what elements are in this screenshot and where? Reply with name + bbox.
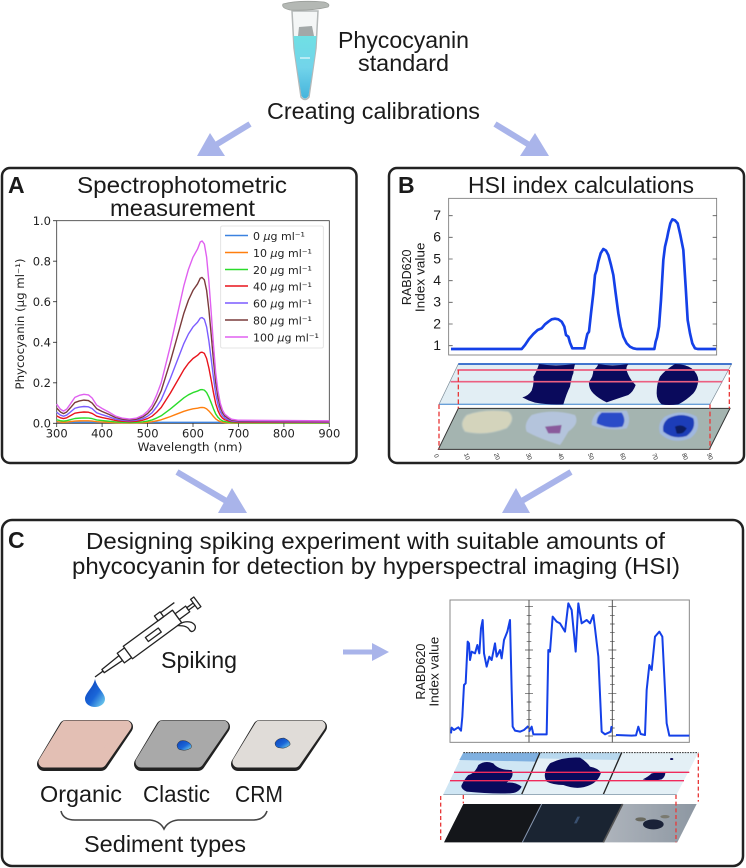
tile labels: [40, 781, 283, 807]
line chart: absorbance spectra: 300: [46, 426, 68, 440]
label: sediment types: Sediment types: [84, 831, 246, 857]
sediment tile: CRM: [238, 726, 320, 764]
strip scale labels: 40: [556, 453, 564, 462]
line chart: absorbance spectra: Wavelength (nm): [138, 440, 242, 454]
heading: creating calibrations: Creating calibrations: [267, 98, 480, 124]
line chart: absorbance spectra: [13, 214, 340, 454]
panel letter B: B: [398, 172, 415, 198]
heading: phycocyanin standard: [338, 27, 469, 76]
icon: drop: [85, 679, 105, 707]
red projection guides C: [441, 753, 698, 843]
line chart: RABD620 index: 4: [433, 272, 441, 288]
image: sample photo strip C: [444, 804, 697, 842]
chart legend: 40 µg ml⁻¹: [253, 280, 312, 294]
title C: phycocyanin for detection by hyperspectral imaging (HSI): [72, 553, 680, 579]
label: spiking: Spiking: [161, 647, 237, 673]
title A: Spectrophotometric: [77, 172, 287, 198]
line chart: absorbance spectra: 0.4: [33, 336, 51, 350]
spike on CRM: [275, 738, 290, 748]
line chart: RABD620 index: [399, 198, 717, 355]
chart legend: [221, 226, 323, 348]
line chart: RABD620 index: 6: [433, 229, 441, 245]
tile labels: Organic: [40, 781, 122, 807]
panel A: spectrophotometric measurement: [2, 168, 356, 463]
title A: measurement: [110, 195, 256, 221]
line chart: absorbance spectra: 1.0: [33, 214, 51, 228]
arrow: A to C: [177, 472, 247, 513]
panel letter A: A: [8, 172, 25, 198]
image: index map strip: [439, 364, 732, 405]
tile labels: Clastic: [143, 781, 210, 807]
strip scale labels: [432, 453, 713, 462]
panel B: HSI index calculations: [389, 168, 744, 463]
line chart: RABD620 index: 1: [433, 337, 441, 353]
icon: phycocyanin tube: [283, 1, 329, 99]
image: sample photo strip: [438, 408, 730, 449]
strip scale labels: 80: [680, 453, 688, 462]
line chart: absorbance spectra: Phycocyanin (µg ml⁻¹): [13, 258, 27, 390]
panel letter C: C: [8, 527, 25, 553]
spike on clastic: [177, 740, 191, 750]
brace: [61, 811, 267, 829]
title B: HSI index calculations: [468, 172, 694, 198]
sediment tile: organic: [44, 726, 126, 764]
line chart: RABD620 index: 5: [433, 250, 441, 266]
line chart: RABD620 index: 3: [433, 294, 441, 310]
line chart: absorbance spectra: 900: [318, 426, 340, 440]
strip scale labels: 50: [586, 453, 594, 462]
strip scale labels: 60: [618, 453, 626, 462]
title A: [77, 172, 287, 221]
strip scale labels: 30: [524, 453, 532, 462]
arrow: to panel B: [495, 124, 549, 156]
line chart: RABD620 index: RABD620: [399, 249, 414, 305]
tile labels: CRM: [235, 781, 283, 807]
chart legend: 60 µg ml⁻¹: [253, 298, 312, 310]
line chart: absorbance spectra: 600: [182, 426, 204, 440]
line chart: RABD620 index: Index value: [413, 242, 428, 312]
line chart: RABD620 index: 2: [433, 315, 441, 331]
heading: phycocyanin standard: standard: [358, 50, 449, 76]
arrow: to panel A: [197, 124, 250, 156]
line chart: absorbance spectra: 0.0: [33, 416, 51, 430]
chart legend: 20 µg ml⁻¹: [253, 264, 312, 277]
heading: phycocyanin standard: Phycocyanin: [338, 27, 469, 53]
strip scale labels: 70: [650, 453, 658, 462]
strip scale labels: 10: [462, 453, 470, 462]
strip scale labels: 20: [492, 453, 500, 462]
line chart: absorbance spectra: 0.6: [33, 295, 51, 309]
line chart: absorbance spectra: 0.8: [33, 254, 51, 268]
strip scale labels: 90: [705, 453, 713, 462]
line chart: absorbance spectra: 800: [273, 426, 295, 440]
image: index map strip C: [443, 753, 698, 794]
line chart: spiked sample index: [413, 600, 689, 742]
line chart: absorbance spectra: 0.2: [33, 376, 51, 390]
strip scale labels: 0: [432, 454, 439, 459]
line chart: spiked sample index: Index value: [426, 637, 441, 707]
title C: [72, 528, 680, 579]
red projection guides: [439, 370, 729, 449]
line chart: absorbance spectra: 400: [91, 426, 113, 440]
arrow: B to C: [502, 472, 571, 513]
chart legend: 80 µg ml⁻¹: [253, 314, 312, 328]
chart legend: 0 µg ml⁻¹: [253, 230, 305, 243]
line chart: absorbance spectra: 700: [227, 426, 249, 440]
line chart: absorbance spectra: 500: [137, 426, 159, 440]
panel C: spiking experiment: [2, 520, 743, 866]
chart legend: 10 µg ml⁻¹: [253, 247, 312, 260]
line chart: RABD620 index: 7: [433, 207, 441, 223]
sediment tile: clastic: [141, 726, 223, 764]
chart legend: 100 µg ml⁻¹: [253, 332, 319, 344]
arrow: to HSI results: [343, 643, 389, 661]
icon: pipette: [87, 591, 210, 694]
title C: Designing spiking experiment with suitable amounts of: [86, 528, 666, 554]
line chart: spiked sample index: RABD620: [413, 644, 428, 700]
